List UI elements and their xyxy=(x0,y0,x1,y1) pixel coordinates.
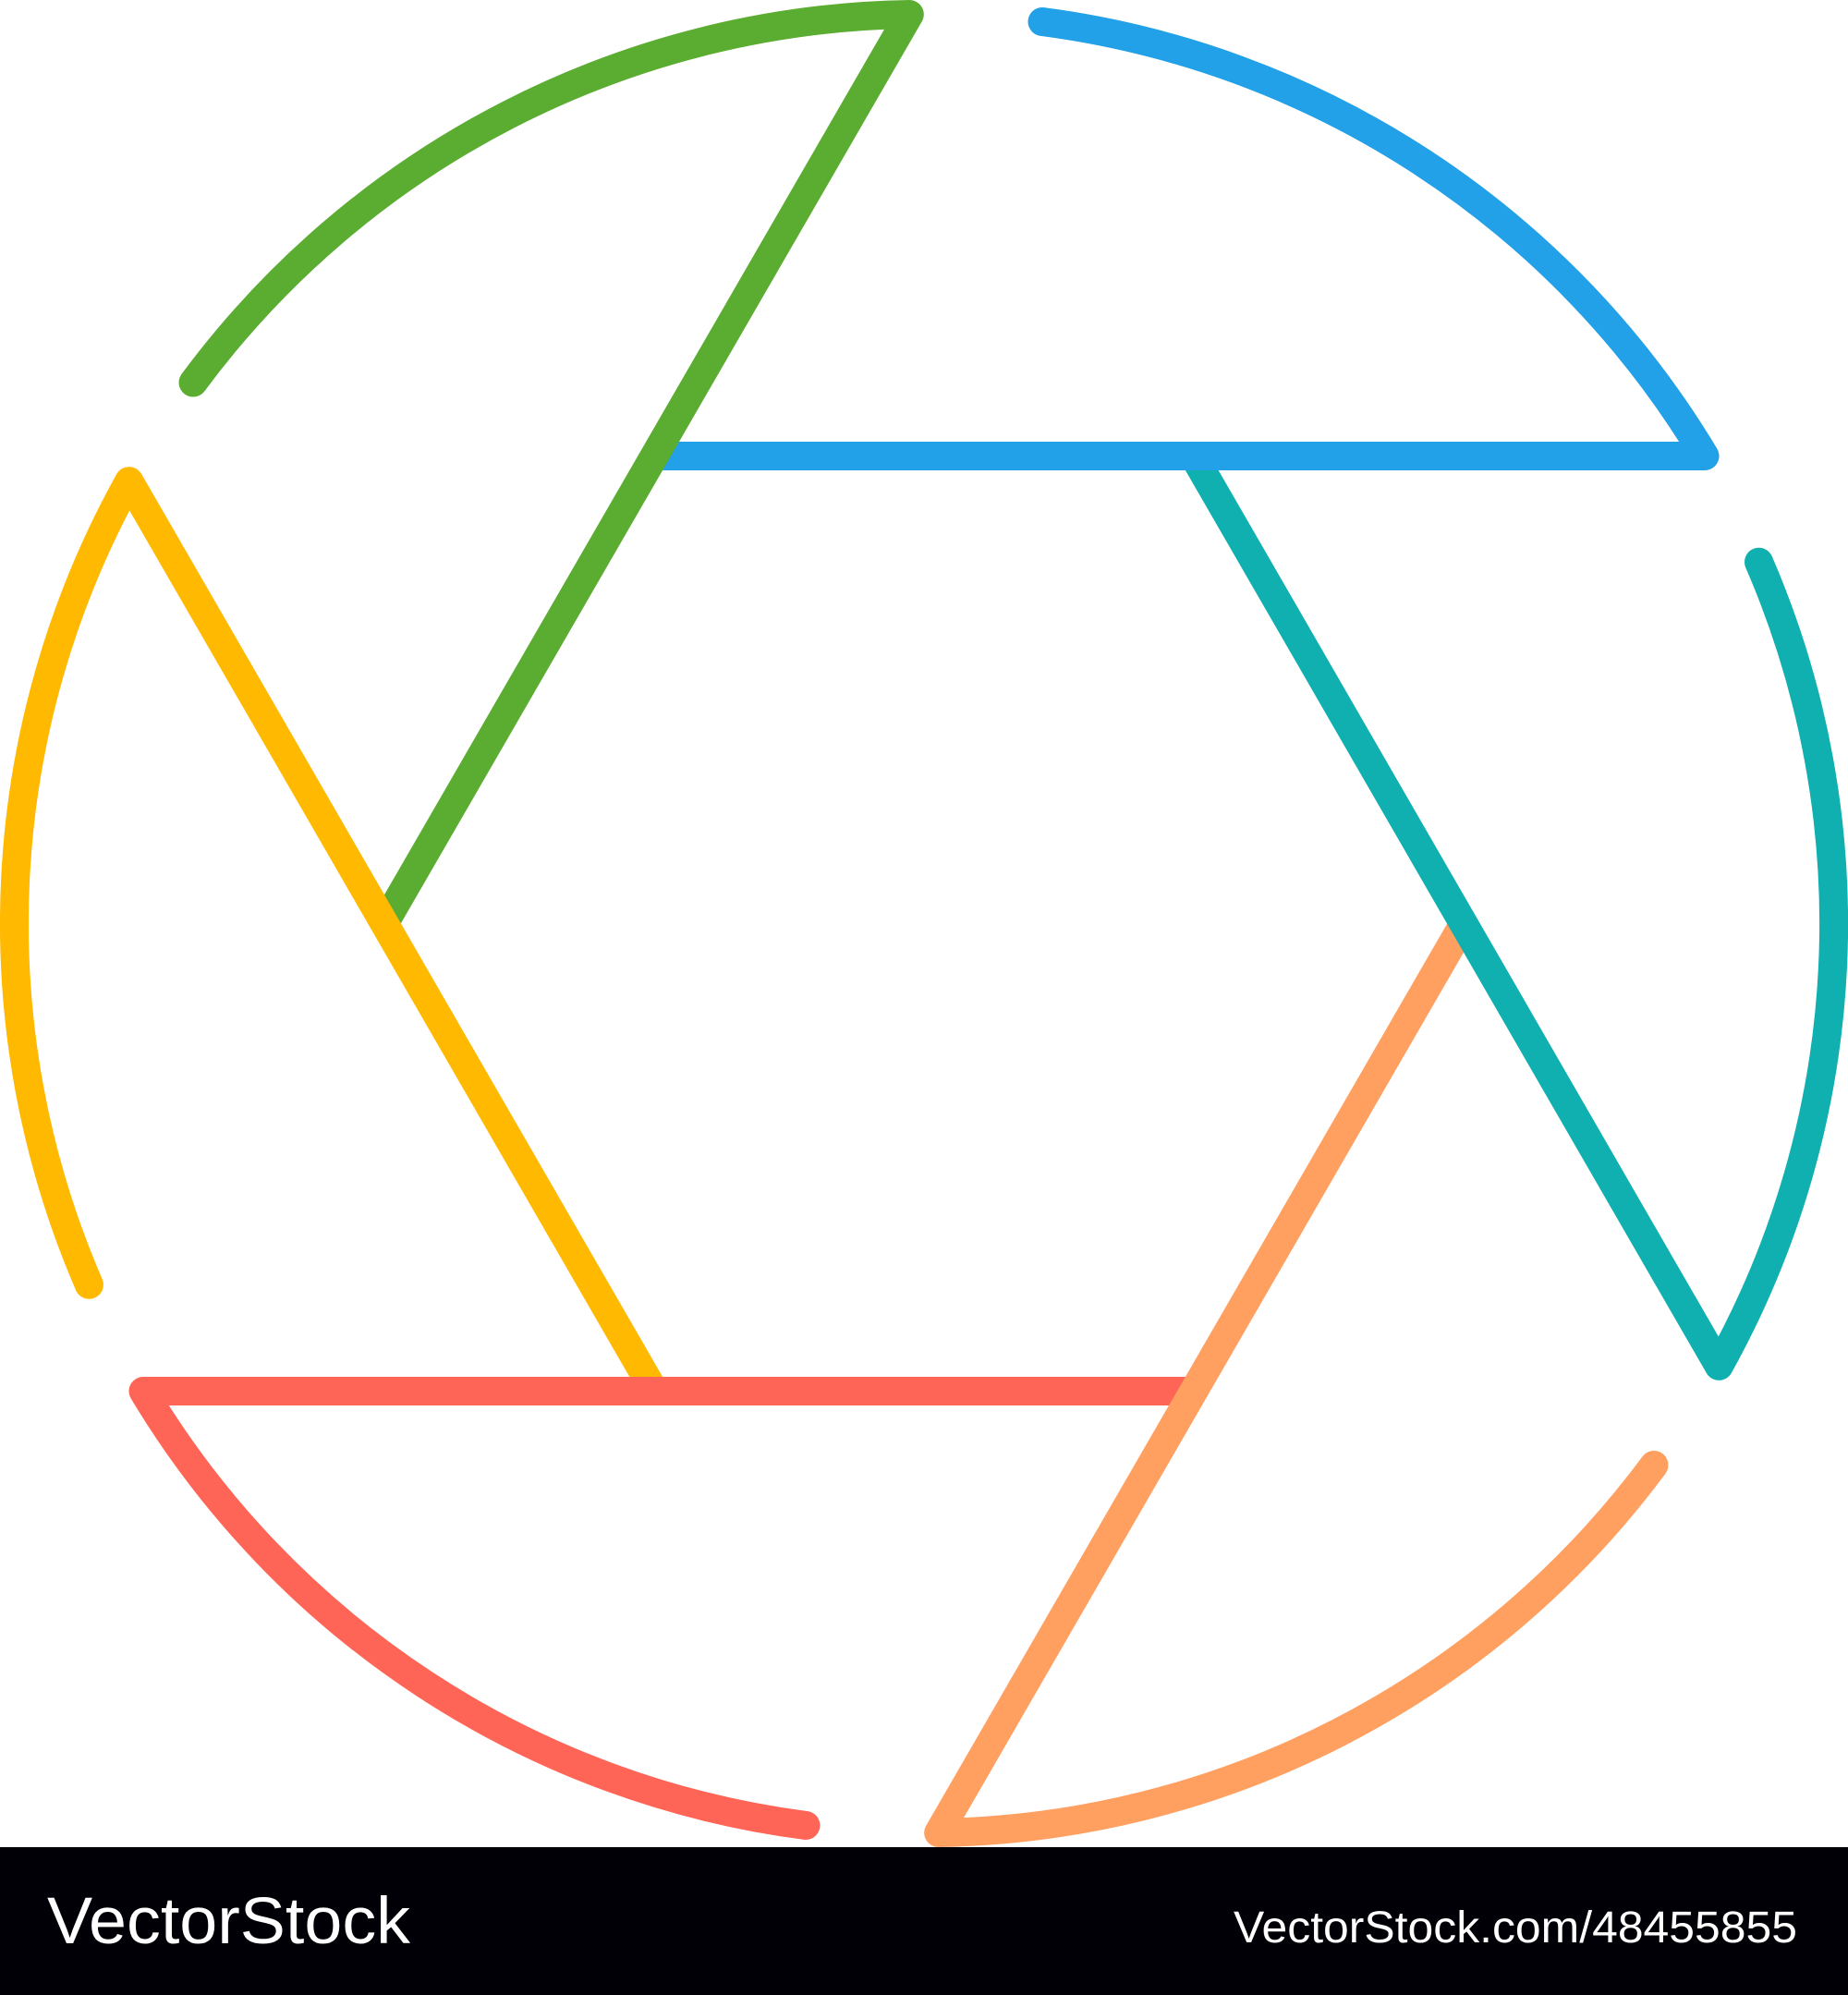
blade cap: red xyxy=(791,1811,821,1840)
blade cap: green xyxy=(179,368,207,397)
blue bar segment overlapping teal blade xyxy=(1137,442,1247,470)
blade: yellow xyxy=(14,481,653,1390)
footer image url: VectorStock.com/48455855 xyxy=(1234,1904,1797,1952)
blade: orange xyxy=(939,926,1654,1833)
footer brand name: VectorStock xyxy=(47,1885,411,1958)
blade: red xyxy=(143,1392,1192,1826)
blade: blue xyxy=(656,22,1705,456)
blade cap: orange xyxy=(1639,1451,1669,1479)
footer bar xyxy=(0,1847,1848,1995)
blade cap: yellow xyxy=(75,1271,103,1299)
blade cap: teal xyxy=(1745,548,1773,577)
blade cap: blue xyxy=(1027,7,1057,36)
blade: green xyxy=(193,15,909,922)
blade: teal xyxy=(1195,458,1834,1366)
